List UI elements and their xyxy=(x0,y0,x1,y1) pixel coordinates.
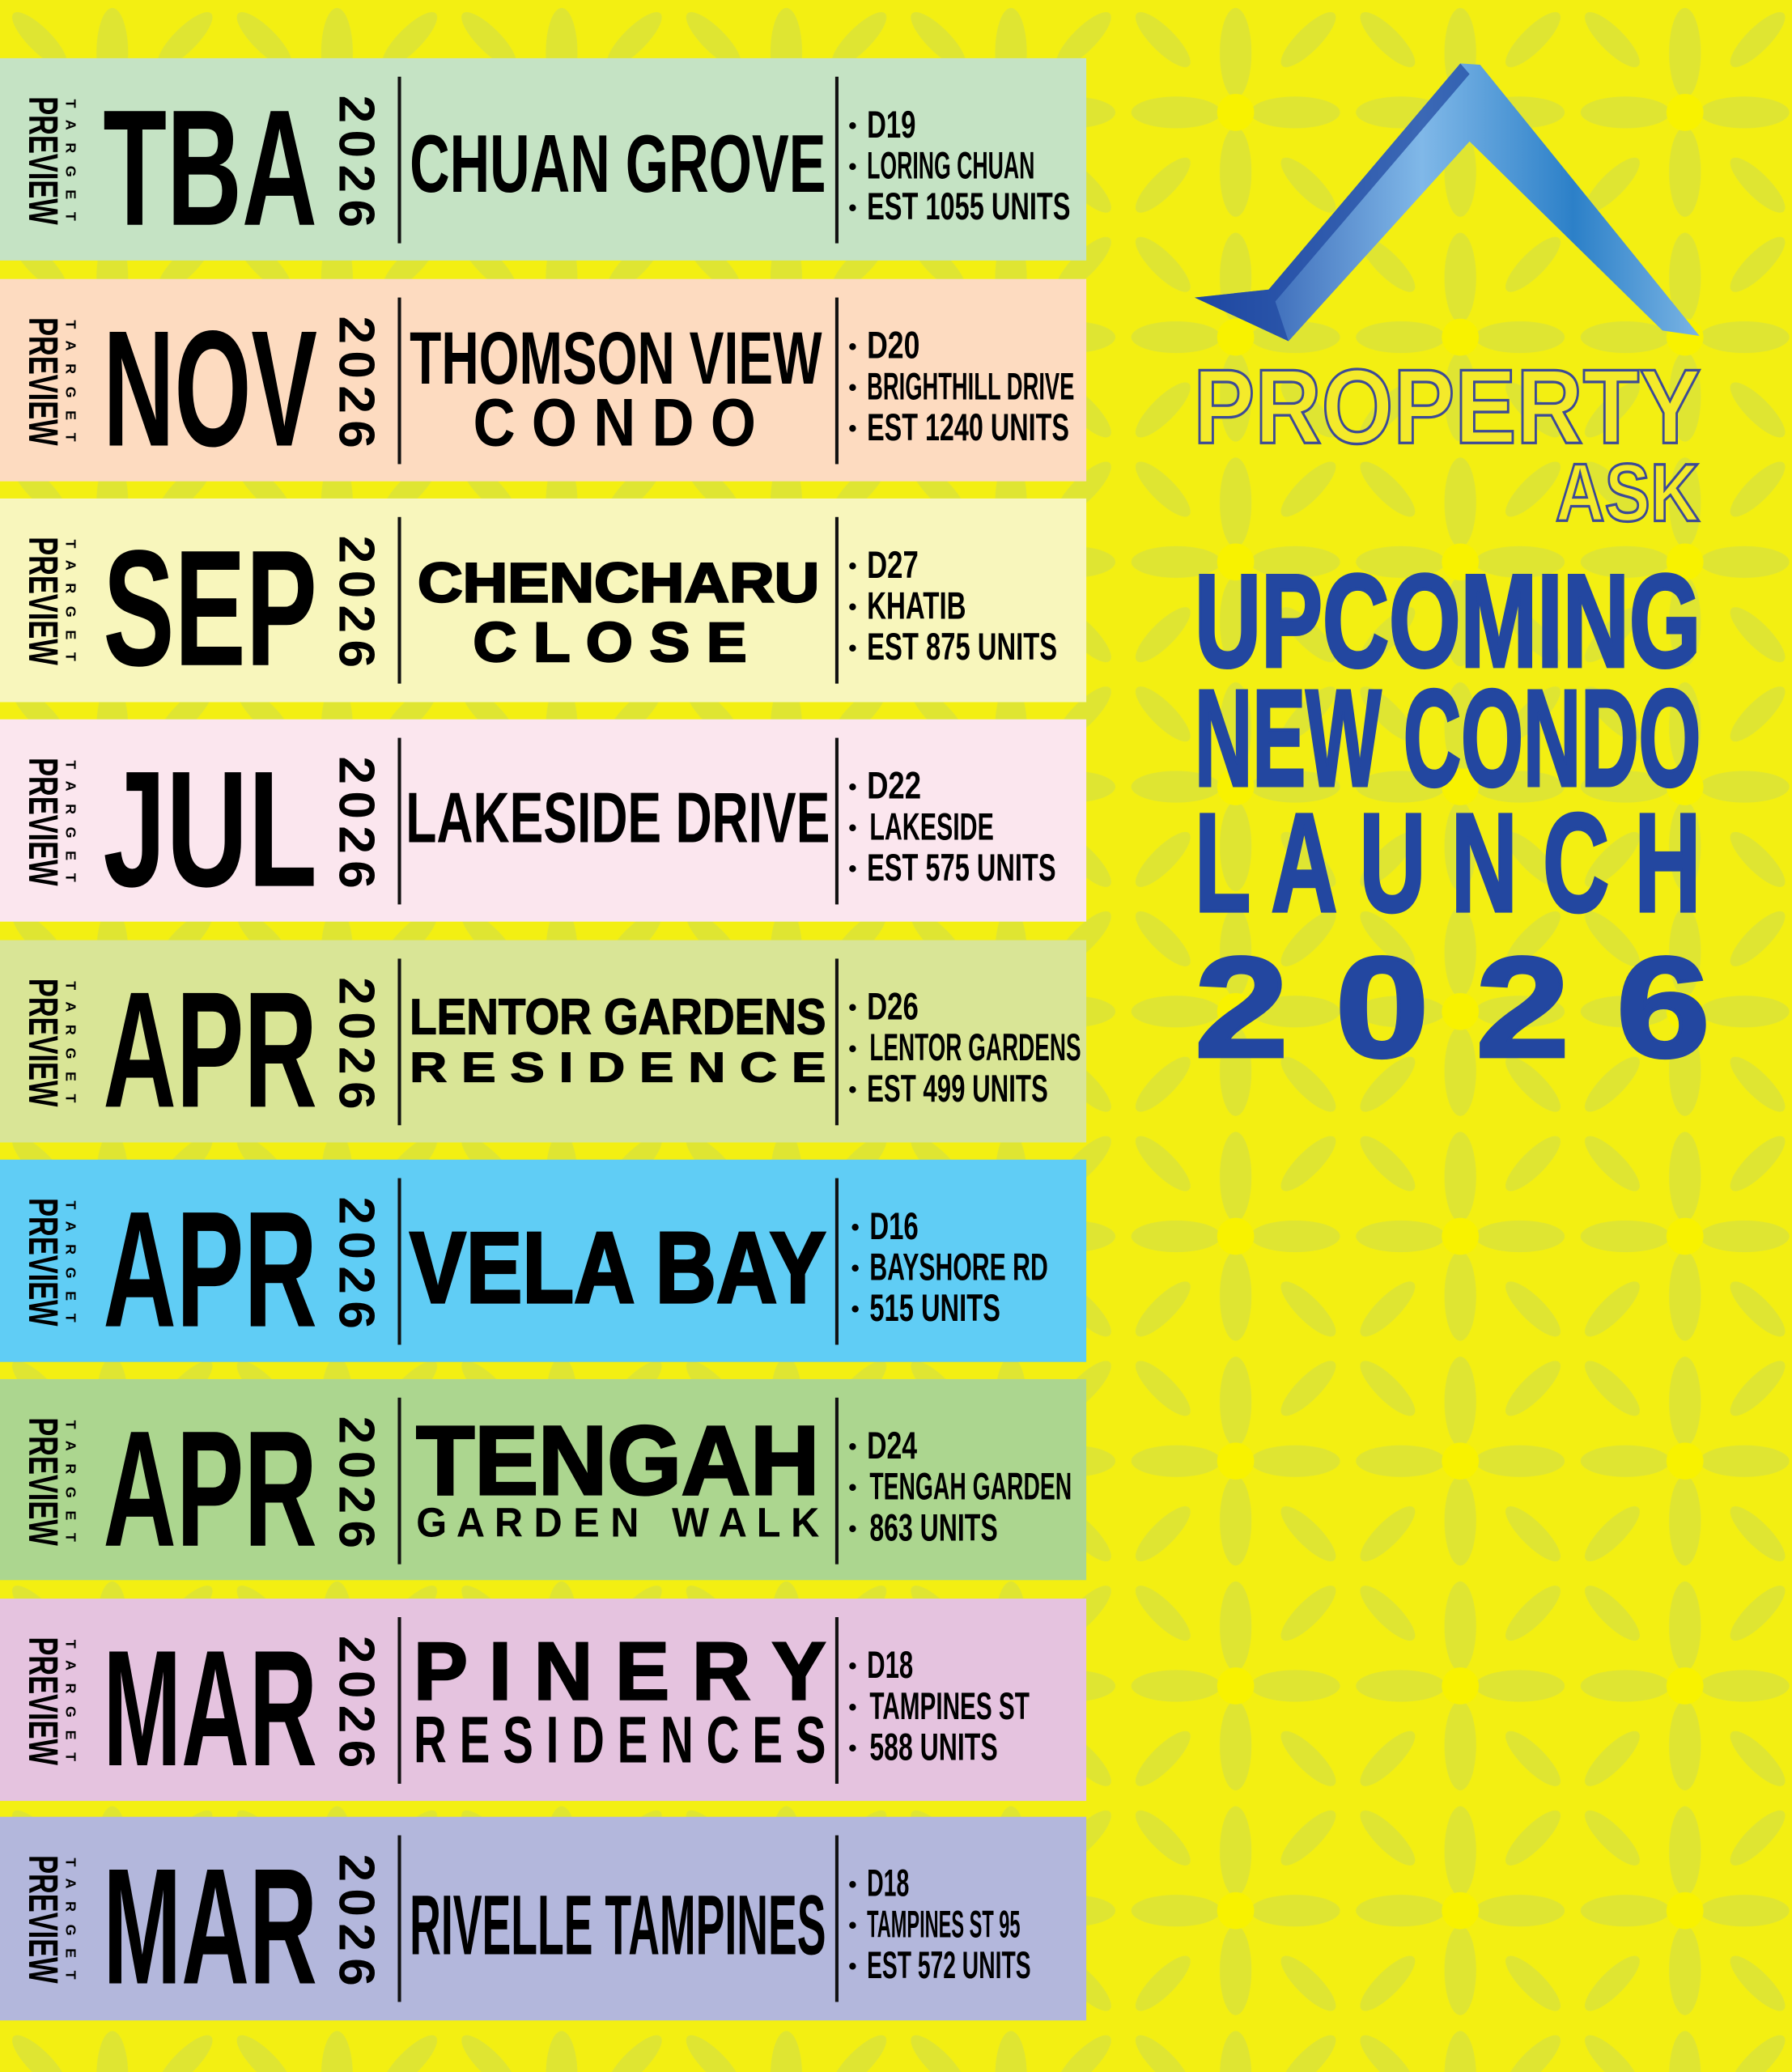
row: Chuan Grove: LORING CHUAN xyxy=(867,145,1034,188)
row: Lentor Gardens Residence: 2026 xyxy=(329,977,384,1110)
row: Tengah Garden Walk: • xyxy=(848,1515,857,1542)
row: Vela Bay xyxy=(0,1160,1086,1362)
row: Lentor Gardens Residence: • xyxy=(848,1035,857,1062)
row: Lentor Gardens Residence: APR xyxy=(103,957,317,1142)
row: Thomson View Condo: THOMSON VIEW xyxy=(410,317,822,400)
row: Lakeside Drive: • xyxy=(848,814,857,841)
row: Lakeside Drive: • xyxy=(848,774,857,800)
row: Lakeside Drive: LAKESIDE xyxy=(869,805,994,848)
row: Vela Bay: • xyxy=(851,1296,860,1323)
row: Rivelle Tampines: • xyxy=(848,1953,857,1980)
row: Chuan Grove: TBA xyxy=(103,76,317,261)
row: Vela Bay: • xyxy=(851,1214,860,1241)
row: Lakeside Drive: 2026 xyxy=(329,756,384,889)
row: Pinery Residences: R E S I D E N C E S xyxy=(414,1704,826,1777)
row: Lentor Gardens Residence: EST 499 UNITS xyxy=(867,1068,1048,1110)
row: Lakeside Drive xyxy=(0,720,1086,922)
row: Lentor Gardens Residence xyxy=(0,940,1086,1143)
row: Chuan Grove: • xyxy=(848,154,857,180)
row: Chuan Grove: TARGET xyxy=(63,100,79,221)
row: Chuan Grove: • xyxy=(848,113,857,139)
row: Thomson View Condo: • xyxy=(848,415,857,442)
row: Chencharu Close: C L O S E xyxy=(473,611,747,673)
row: Chencharu Close: TARGET xyxy=(63,540,79,661)
row: Vela Bay: D16 xyxy=(869,1205,919,1248)
row: Lentor Gardens Residence: LENTOR GARDENS xyxy=(410,990,826,1046)
row: Chencharu Close: • xyxy=(848,635,857,661)
logo: roof icon xyxy=(1195,63,1700,341)
row: Chencharu Close: EST 875 UNITS xyxy=(867,626,1057,669)
row: Tengah Garden Walk: 863 UNITS xyxy=(869,1506,998,1549)
row: Rivelle Tampines: TARGET xyxy=(63,1858,79,1980)
row: Pinery Residences: 588 UNITS xyxy=(869,1726,998,1768)
row: Lakeside Drive: LAKESIDE DRIVE xyxy=(406,778,830,858)
row: Rivelle Tampines: TAMPINES ST 95 xyxy=(867,1903,1020,1946)
row: Chuan Grove: D19 xyxy=(867,104,915,146)
row: Vela Bay: VELA BAY xyxy=(410,1212,826,1324)
row: Lentor Gardens Residence: D26 xyxy=(867,986,919,1029)
row: Lentor Gardens Residence: • xyxy=(848,1076,857,1103)
row: Lakeside Drive: • xyxy=(848,856,857,882)
row: Tengah Garden Walk: D24 xyxy=(867,1424,918,1467)
row: Lakeside Drive: EST 575 UNITS xyxy=(867,847,1056,890)
row: Vela Bay: 2026 xyxy=(329,1196,384,1329)
row: Chencharu Close: • xyxy=(848,553,857,580)
row: Thomson View Condo: EST 1240 UNITS xyxy=(867,406,1069,449)
row: Vela Bay: 515 UNITS xyxy=(869,1287,1000,1330)
row: Thomson View Condo: C O N D O xyxy=(473,385,756,461)
logo: wordmark: ASK xyxy=(1556,448,1700,539)
row: Tengah Garden Walk: • xyxy=(848,1475,857,1501)
row: Chuan Grove: • xyxy=(848,194,857,221)
row: Chencharu Close: 2026 xyxy=(329,536,384,668)
row: Tengah Garden Walk: TARGET xyxy=(63,1420,79,1542)
row: Thomson View Condo: TARGET xyxy=(63,320,79,442)
row: Chuan Grove: CHUAN GROVE xyxy=(410,118,826,210)
row: Chencharu Close: • xyxy=(848,594,857,621)
row: Thomson View Condo: • xyxy=(848,333,857,360)
row: Tengah Garden Walk xyxy=(0,1379,1086,1582)
row: Chuan Grove: 2026 xyxy=(329,96,384,227)
row: Thomson View Condo: NOV xyxy=(103,297,317,482)
row: Pinery Residences: • xyxy=(848,1653,857,1679)
row: Tengah Garden Walk: 2026 xyxy=(329,1416,384,1548)
row: Chencharu Close: PREVIEW xyxy=(20,537,66,665)
row: Lentor Gardens Residence: LENTOR GARDENS xyxy=(869,1026,1081,1069)
row: Rivelle Tampines: • xyxy=(848,1912,857,1938)
row: Vela Bay: TARGET xyxy=(63,1200,79,1323)
row: Tengah Garden Walk: PREVIEW xyxy=(20,1417,66,1546)
row: Pinery Residences: TARGET xyxy=(63,1640,79,1761)
row: Chencharu Close: SEP xyxy=(103,516,317,701)
row: Thomson View Condo: 2026 xyxy=(329,316,384,448)
row: Rivelle Tampines: D18 xyxy=(867,1862,909,1905)
row: Vela Bay: • xyxy=(851,1255,860,1282)
row: Pinery Residences xyxy=(0,1599,1086,1801)
row: Tengah Garden Walk: G A R D E N W A L K xyxy=(416,1499,820,1545)
title: upcoming new condo launch 2026 xyxy=(1195,546,1710,1087)
row: Rivelle Tampines xyxy=(0,1817,1086,2020)
row: Pinery Residences: 2026 xyxy=(329,1636,384,1768)
row: Thomson View Condo: • xyxy=(848,374,857,401)
row: Vela Bay: APR xyxy=(103,1178,317,1362)
row: Chuan Grove: PREVIEW xyxy=(20,96,66,225)
row: Vela Bay: BAYSHORE RD xyxy=(869,1246,1048,1289)
row: Pinery Residences: PREVIEW xyxy=(20,1637,66,1765)
row: Thomson View Condo: PREVIEW xyxy=(20,317,66,446)
row: Lakeside Drive: D22 xyxy=(867,765,921,808)
row: Tengah Garden Walk: TENGAH GARDEN xyxy=(869,1466,1072,1509)
row: Pinery Residences: • xyxy=(848,1735,857,1762)
row: Thomson View Condo xyxy=(0,279,1086,482)
row: Pinery Residences: D18 xyxy=(867,1644,913,1687)
row: Chuan Grove: EST 1055 UNITS xyxy=(867,185,1071,228)
row: Lakeside Drive: JUL xyxy=(103,737,317,922)
row: Chencharu Close: D27 xyxy=(867,544,919,587)
row: Vela Bay: PREVIEW xyxy=(20,1198,66,1327)
row: Lakeside Drive: PREVIEW xyxy=(20,758,66,886)
row: Rivelle Tampines: EST 572 UNITS xyxy=(867,1944,1031,1987)
row: Lentor Gardens Residence: TARGET xyxy=(63,981,79,1103)
row: Tengah Garden Walk: APR xyxy=(103,1397,317,1582)
row: Rivelle Tampines: • xyxy=(848,1871,857,1898)
row: Chuan Grove xyxy=(0,58,1086,261)
row: Rivelle Tampines: MAR xyxy=(103,1834,317,2019)
row: Tengah Garden Walk: • xyxy=(848,1433,857,1460)
row: Rivelle Tampines: 2026 xyxy=(329,1853,384,1986)
row: Tengah Garden Walk: TENGAH xyxy=(416,1406,819,1515)
title: upcoming new condo launch 2026: 2 0 2 6 xyxy=(1195,928,1710,1087)
row: Pinery Residences: MAR xyxy=(103,1616,317,1801)
row: Chencharu Close: KHATIB xyxy=(867,585,966,628)
row: Thomson View Condo: BRIGHTHILL DRIVE xyxy=(867,365,1074,408)
row: Lentor Gardens Residence: • xyxy=(848,995,857,1021)
row: Chencharu Close xyxy=(0,499,1086,702)
row: Chencharu Close: CHENCHARU xyxy=(418,551,819,614)
row: Pinery Residences: P I N E R Y xyxy=(414,1625,826,1717)
row: Pinery Residences: • xyxy=(848,1694,857,1721)
row: Rivelle Tampines: PREVIEW xyxy=(20,1855,66,1984)
row: Thomson View Condo: D20 xyxy=(867,325,919,367)
row: Pinery Residences: TAMPINES ST xyxy=(869,1685,1030,1728)
logo: wordmark xyxy=(1193,347,1701,539)
logo: wordmark: PROPERTY xyxy=(1193,347,1701,465)
row: Lentor Gardens Residence: PREVIEW xyxy=(20,979,66,1107)
row: Lentor Gardens Residence: R E S I D E N C E xyxy=(410,1044,826,1091)
row: Lakeside Drive: TARGET xyxy=(63,760,79,882)
row: Rivelle Tampines: RIVELLE TAMPINES xyxy=(410,1879,826,1973)
